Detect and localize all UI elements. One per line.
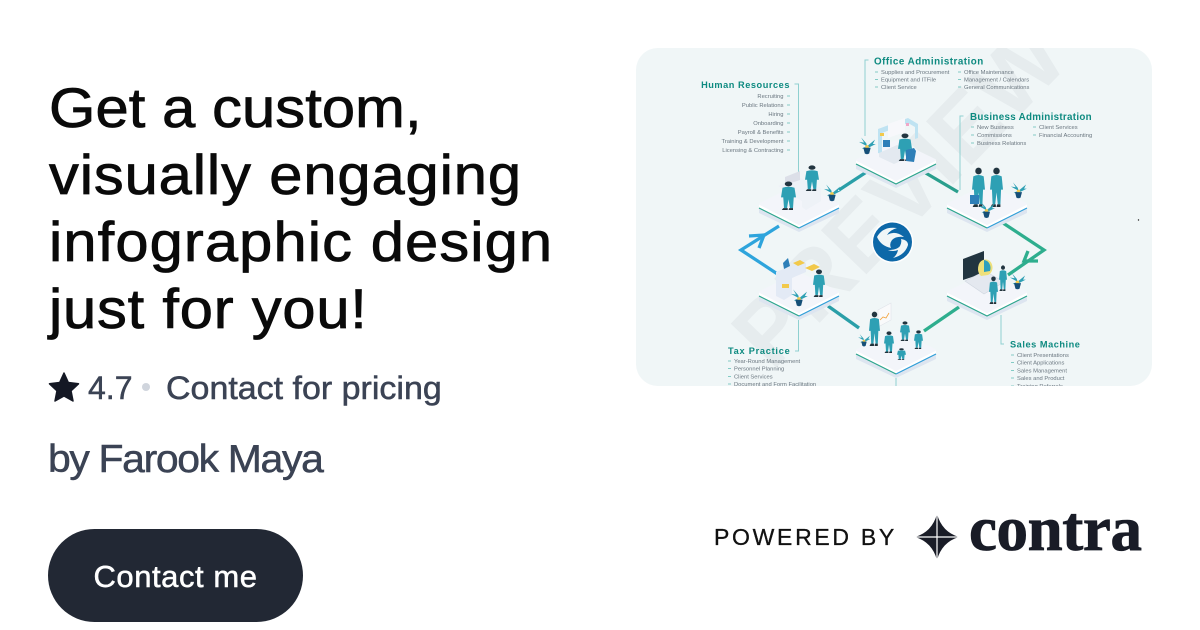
text: business administration: Client Services (1039, 125, 1078, 131)
text: business administration: Business Administration (970, 112, 1092, 123)
text: business administration: Financial Accounting (1039, 133, 1092, 139)
text: sales machine: Sales Management (1017, 368, 1067, 374)
connector arrows (741, 171, 1044, 331)
powered by label: POWERED BY (714, 524, 897, 550)
text: human resources: Payroll & Benefits (738, 130, 784, 136)
title: visually engaging (49, 143, 522, 206)
text: sales machine: Client Applications (1017, 360, 1064, 366)
icon: contra star (916, 516, 958, 558)
title: just for you! (49, 277, 368, 340)
text: business administration: Commissions (977, 133, 1012, 139)
text: human resources: Hiring (768, 112, 784, 118)
text: human resources: Recruiting (757, 94, 784, 100)
text: office administration: Office Maintenance (964, 70, 1014, 76)
text: human resources: Licensing & Contracting (722, 148, 784, 154)
cubicle (878, 118, 918, 154)
text: sales machine: Client Presentations (1017, 353, 1069, 359)
text: office administration: Management / Calendars (964, 78, 1029, 84)
logo: center swirl (872, 221, 914, 263)
text: office administration: General Communications (964, 85, 1030, 91)
text: sales machine (1010, 341, 1080, 386)
rating and price row (48, 370, 442, 406)
price: Contact for pricing (166, 370, 442, 406)
text: office administration: Client Service (881, 85, 917, 91)
text: tax practice: Tax Practice (728, 346, 790, 356)
title (47, 76, 553, 340)
text: business administration: Business Relations (977, 141, 1026, 147)
platform: business administration (947, 168, 1027, 232)
panel: infographic preview (636, 48, 1152, 386)
text: tax practice (728, 346, 816, 388)
title: Get a custom, (49, 76, 422, 139)
text: human resources (701, 80, 790, 154)
text: human resources: Onboarding (753, 121, 784, 127)
text: human resources: Human Resources (701, 80, 790, 90)
platform: sales machine (947, 251, 1027, 320)
button: contact me (48, 529, 303, 622)
text: office administration (874, 56, 1030, 91)
logo wordmark: contra: contra (969, 494, 1142, 564)
text: sales machine: Sales Machine (1010, 340, 1080, 350)
text: tax practice: Personnel Planning (734, 366, 784, 372)
text: business administration: New Business (977, 125, 1014, 131)
text: office administration: Supplies and Procurement (881, 70, 950, 76)
rating value: 4.7 (88, 370, 132, 406)
text: sales machine: Sales and Product (1017, 376, 1065, 382)
icon: star (48, 372, 80, 402)
text: business administration (970, 112, 1092, 147)
leader lines (794, 60, 1004, 388)
platform: office administration (856, 118, 936, 188)
platform: tax practice (759, 258, 839, 320)
text: tax practice: Client Services (734, 374, 773, 380)
text: human resources: Public Relations (742, 103, 784, 109)
platform: training (856, 303, 936, 378)
separator dot (142, 383, 150, 391)
button: contact me: Contact me (93, 559, 258, 594)
text: office administration: Equipment and ITFile (881, 78, 936, 84)
text: tax practice: Year-Round Management (734, 359, 801, 365)
platform: human resources (759, 165, 841, 232)
text: office administration: Office Administration (874, 56, 984, 68)
author: by Farook Maya (48, 438, 322, 481)
title: infographic design (49, 210, 553, 273)
text: human resources: Training & Development (722, 139, 784, 145)
